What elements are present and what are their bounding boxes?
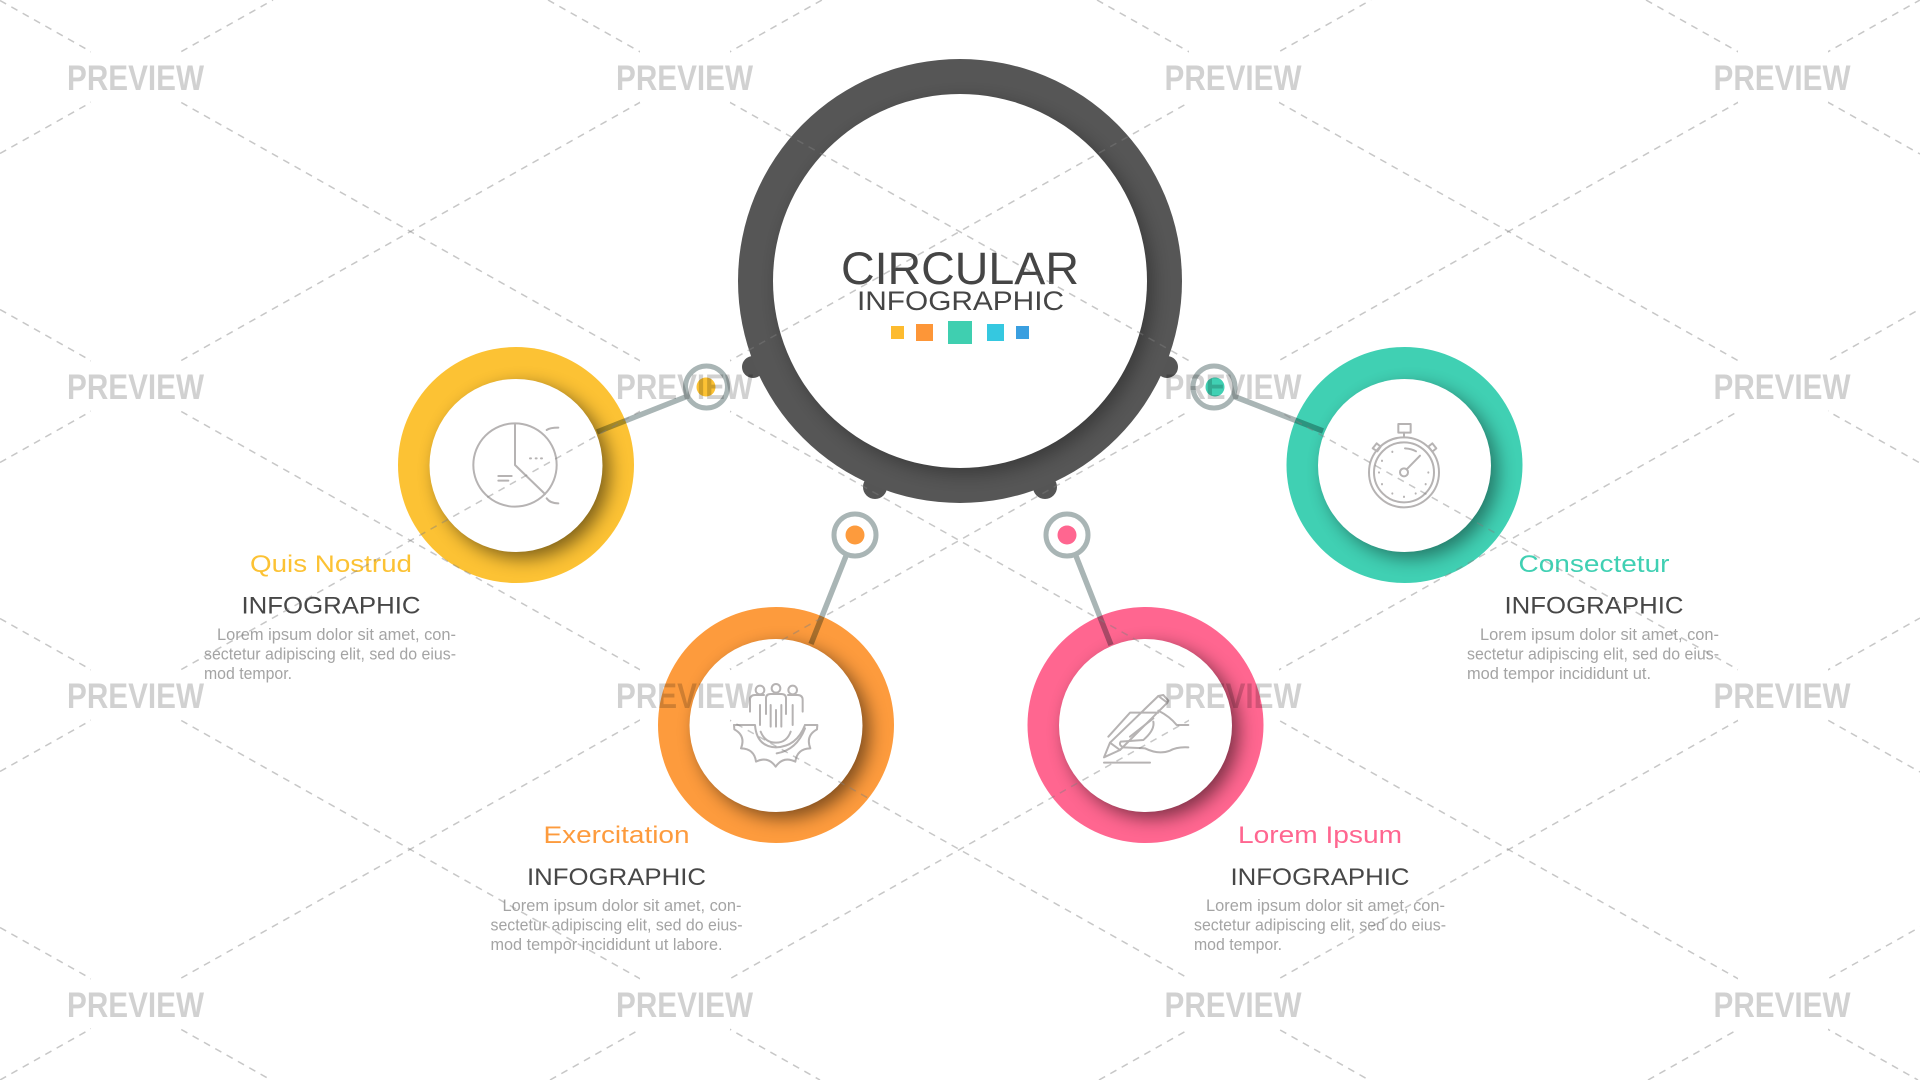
label: Consectetur: [1467, 551, 1719, 683]
connector: yellow: [597, 396, 688, 432]
label: Lorem Ipsum: mod tempor.: [1194, 936, 1282, 954]
watermark: PREVIEW grid: PREVIEW: [1164, 59, 1302, 98]
title: INFOGRAPHIC: [857, 286, 1064, 316]
connector: orange: [811, 556, 846, 644]
marker: orange: [834, 514, 876, 556]
watermark: PREVIEW grid: PREVIEW: [67, 368, 204, 407]
ring: pink: [1028, 607, 1264, 843]
icon: hand with pen: [1104, 695, 1188, 763]
watermark: PREVIEW grid: PREVIEW: [616, 677, 753, 716]
label: Consectetur: sectetur adipiscing elit, sed do eius-: [1467, 646, 1719, 664]
label: Exercitation: INFOGRAPHIC: [527, 864, 706, 891]
ring: yellow: [398, 347, 634, 583]
label: Exercitation: mod tempor incididunt ut labore.: [490, 936, 722, 954]
watermark: PREVIEW grid: PREVIEW: [67, 59, 204, 98]
watermark: PREVIEW grid: PREVIEW: [1714, 677, 1850, 716]
label: Exercitation: sectetur adipiscing elit, sed do eius-: [490, 916, 742, 934]
marker: teal: [1193, 366, 1235, 408]
connector: teal: [1233, 396, 1323, 431]
label: Consectetur: INFOGRAPHIC: [1504, 592, 1684, 620]
icon: stopwatch: [1369, 424, 1439, 507]
label: Lorem Ipsum: Lorem ipsum dolor sit amet, con-: [1206, 897, 1445, 915]
label: Lorem Ipsum: [1194, 822, 1446, 954]
label: Consectetur: mod tempor incididunt ut.: [1467, 665, 1651, 683]
ring: orange: [658, 607, 894, 843]
label: Lorem Ipsum: Lorem Ipsum: [1238, 822, 1402, 849]
label: Quis Nostrud: [204, 551, 456, 683]
watermark: PREVIEW grid: PREVIEW: [616, 986, 753, 1025]
watermark: PREVIEW grid: PREVIEW: [1164, 986, 1302, 1025]
connector: pink: [1076, 556, 1111, 645]
watermark: PREVIEW grid: PREVIEW: [67, 677, 204, 716]
marker: pink: [1046, 514, 1088, 556]
title: CIRCULAR: [841, 243, 1079, 294]
watermark: PREVIEW grid: PREVIEW: [1714, 368, 1850, 407]
ring: teal: [1286, 347, 1522, 583]
title: [841, 243, 1079, 316]
label: Quis Nostrud: Quis Nostrud: [250, 551, 412, 578]
label: Exercitation: Lorem ipsum dolor sit amet, con-: [502, 897, 742, 915]
watermark: PREVIEW grid: PREVIEW: [1714, 59, 1850, 98]
central ring: [738, 59, 1182, 503]
marker: yellow: [686, 366, 728, 408]
icon: team and gear: [734, 684, 817, 767]
watermark: PREVIEW grid: PREVIEW: [1164, 677, 1302, 716]
label: Lorem Ipsum: sectetur adipiscing elit, sed do eius-: [1194, 916, 1446, 934]
label: Quis Nostrud: Lorem ipsum dolor sit amet, con-: [217, 626, 456, 644]
label: Quis Nostrud: INFOGRAPHIC: [242, 592, 420, 620]
label: Consectetur: Consectetur: [1518, 551, 1670, 578]
label: Lorem Ipsum: INFOGRAPHIC: [1230, 864, 1410, 891]
watermark: PREVIEW grid: PREVIEW: [1714, 986, 1850, 1025]
watermark: PREVIEW grid: PREVIEW: [67, 986, 204, 1025]
label: Consectetur: Lorem ipsum dolor sit amet, con-: [1480, 626, 1719, 644]
label: Exercitation: [490, 822, 742, 954]
watermark: PREVIEW grid: PREVIEW: [1164, 368, 1302, 407]
colour squares: [891, 321, 1029, 344]
watermark: PREVIEW grid: PREVIEW: [616, 368, 753, 407]
icon: pie chart: [473, 423, 558, 507]
label: Exercitation: Exercitation: [544, 822, 690, 849]
label: Quis Nostrud: sectetur adipiscing elit, sed do eius-: [204, 646, 456, 664]
watermark: PREVIEW grid: PREVIEW: [616, 59, 753, 98]
label: Quis Nostrud: mod tempor.: [204, 665, 292, 683]
